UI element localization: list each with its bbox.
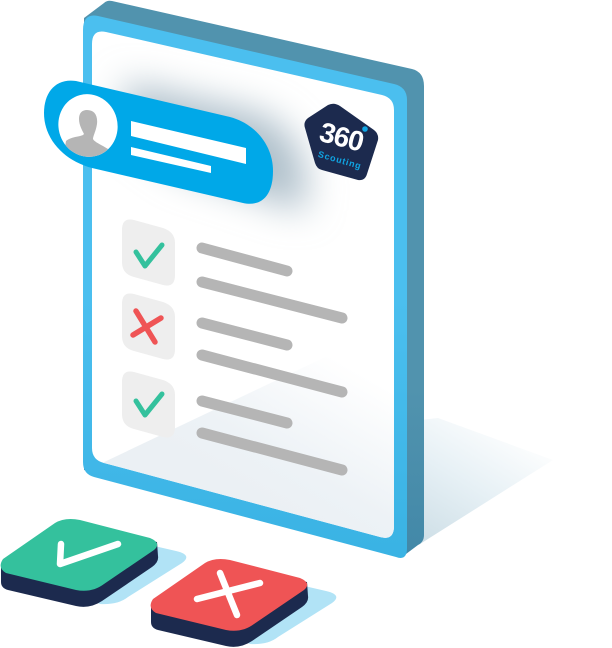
- reject button top: [151, 559, 307, 631]
- page floor reflection: [102, 382, 394, 538]
- avatar circle: [58, 94, 118, 157]
- checklist row 1: [122, 219, 342, 318]
- green tick 3: [136, 394, 162, 415]
- name bar: [131, 121, 246, 164]
- text line 3b: [202, 433, 342, 470]
- logo number 360: 360: [316, 116, 367, 158]
- text line 2b: [202, 355, 342, 392]
- tile 1: [122, 219, 175, 286]
- approve button shadow: [90, 545, 186, 604]
- tile 2: [122, 293, 175, 360]
- floor shadow behind document: [420, 418, 553, 544]
- document side edge: [84, 1, 424, 557]
- approve button: [1, 519, 186, 607]
- reject button: [151, 559, 336, 647]
- text line 2a: [202, 323, 287, 345]
- reject button shadow: [240, 585, 336, 644]
- approve check mark: [60, 544, 118, 564]
- document white page: [92, 32, 394, 538]
- logo word Scouting: Scouting: [317, 149, 363, 171]
- text line 3a: [202, 401, 287, 423]
- approve button top: [1, 519, 157, 591]
- reject button base: [151, 570, 308, 647]
- checklist row 2: [122, 293, 342, 392]
- avatar silhouette: [65, 110, 108, 157]
- logo dot: [362, 126, 368, 132]
- reject cross mark: [197, 573, 260, 615]
- document blue frame: [83, 16, 407, 558]
- text line 1a: [202, 248, 287, 271]
- approve button base: [1, 530, 158, 607]
- pill drop shadow: [125, 82, 306, 212]
- tile 3: [122, 371, 175, 438]
- profile pill: [44, 81, 273, 204]
- logo: 360 Scouting: [304, 104, 378, 180]
- detail bar: [131, 147, 211, 173]
- text line 1b: [202, 282, 342, 318]
- checklist row 3: [122, 371, 342, 470]
- red cross: [133, 311, 161, 342]
- green tick 1: [136, 245, 162, 266]
